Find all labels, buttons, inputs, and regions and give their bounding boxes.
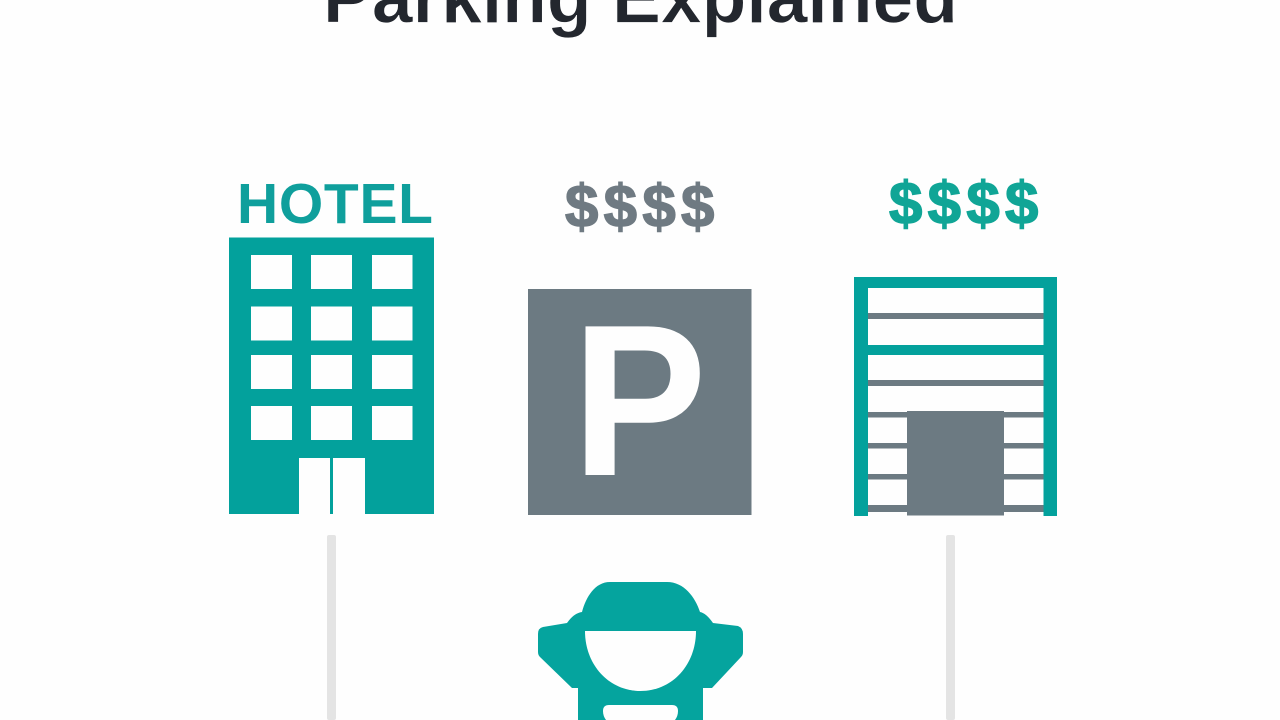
icon: hotel building	[229, 238, 434, 514]
icon: valet attendant	[538, 582, 743, 720]
price label: teal dollars: $$$$	[889, 170, 1044, 237]
icon: parking garage	[854, 277, 1057, 516]
icon: parking sign	[528, 281, 752, 521]
connector: right pole	[946, 535, 955, 720]
price label: gray dollars: $$$$	[565, 173, 720, 240]
heading: hotel: HOTEL	[237, 172, 434, 236]
connector: left pole	[327, 535, 336, 720]
icon: parking sign: P	[572, 281, 707, 521]
